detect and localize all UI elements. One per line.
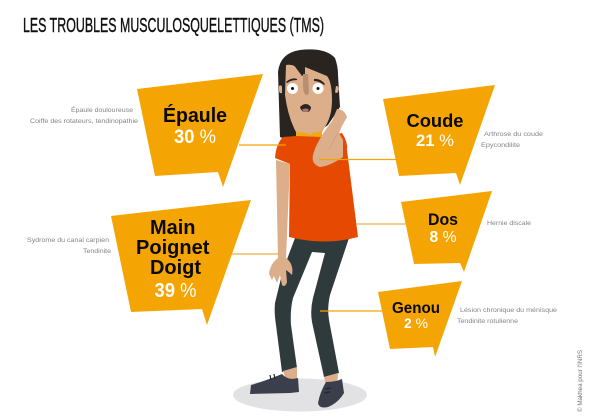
percentage: 2 % [404,315,428,331]
text block: Main conditions: Tendinite [83,248,111,255]
open mouth [300,104,311,112]
text block: Coude conditions: Arthrose du coude [484,131,543,138]
callout shape [111,200,251,325]
hair back [278,49,340,145]
callout shape [401,191,492,272]
text block: Épaule conditions: Coiffe des rotateurs, tendinopathie [30,118,138,125]
ankles [283,367,338,385]
label: Dos [428,210,458,229]
figure: woman with musculoskeletal pain [233,49,367,411]
nose [303,74,309,95]
right shoe [318,379,344,408]
ground shadow [233,378,367,412]
connector [239,144,286,146]
text block: Épaule conditions [30,105,138,125]
collar [296,131,322,137]
label: Genou [392,300,440,317]
callout shape [383,85,495,185]
labels: Doigt [150,257,201,279]
percentage: 21 % [416,131,454,150]
text block: Genou conditions: Lésion chronique du ménisque [460,307,557,314]
text block: Main conditions [27,237,111,255]
credit: © Makhea pour l'INRS [577,350,584,412]
percentage: 30 % [174,127,216,148]
face and neck [285,65,332,136]
title: LES TROUBLES MUSCULOSQUELETTIQUES (TMS) [23,15,324,37]
text block: Genou conditions: Tendinite rotulienne [457,318,518,325]
panel: Coude [319,85,495,185]
percentage: 8 % [430,229,456,246]
eyes [286,78,325,94]
labels: Poignet [136,237,210,259]
left arm and hand [269,160,292,286]
arm crease [329,132,338,150]
left shoe [250,374,299,394]
connector [319,158,396,160]
text block: Main conditions: Sydrome du canal carpien [27,237,109,244]
legs [275,238,349,377]
text block: Coude conditions [481,131,543,149]
shirt [275,133,358,242]
label: Épaule [163,104,227,127]
callout shape [137,74,263,187]
percentage: 39 % [154,280,197,302]
panel: Genou [320,281,462,357]
raised forearm [313,109,347,167]
connector [356,223,406,225]
connector [232,253,279,255]
connector [320,310,382,312]
panel: Épaule [137,74,286,187]
text block: Dos conditions: Hernie discale [487,220,531,227]
text block: Genou conditions [457,307,557,325]
ears [279,85,339,93]
labels: Main [150,217,196,239]
panel: Dos [356,191,492,272]
label: Coude [406,111,464,131]
callout shape [378,281,462,357]
panel: Main Poignet Doigt [111,200,279,325]
text block: Épaule conditions: Épaule douloureuse [71,105,133,114]
text block: Coude conditions: Epycondilite [481,142,520,149]
